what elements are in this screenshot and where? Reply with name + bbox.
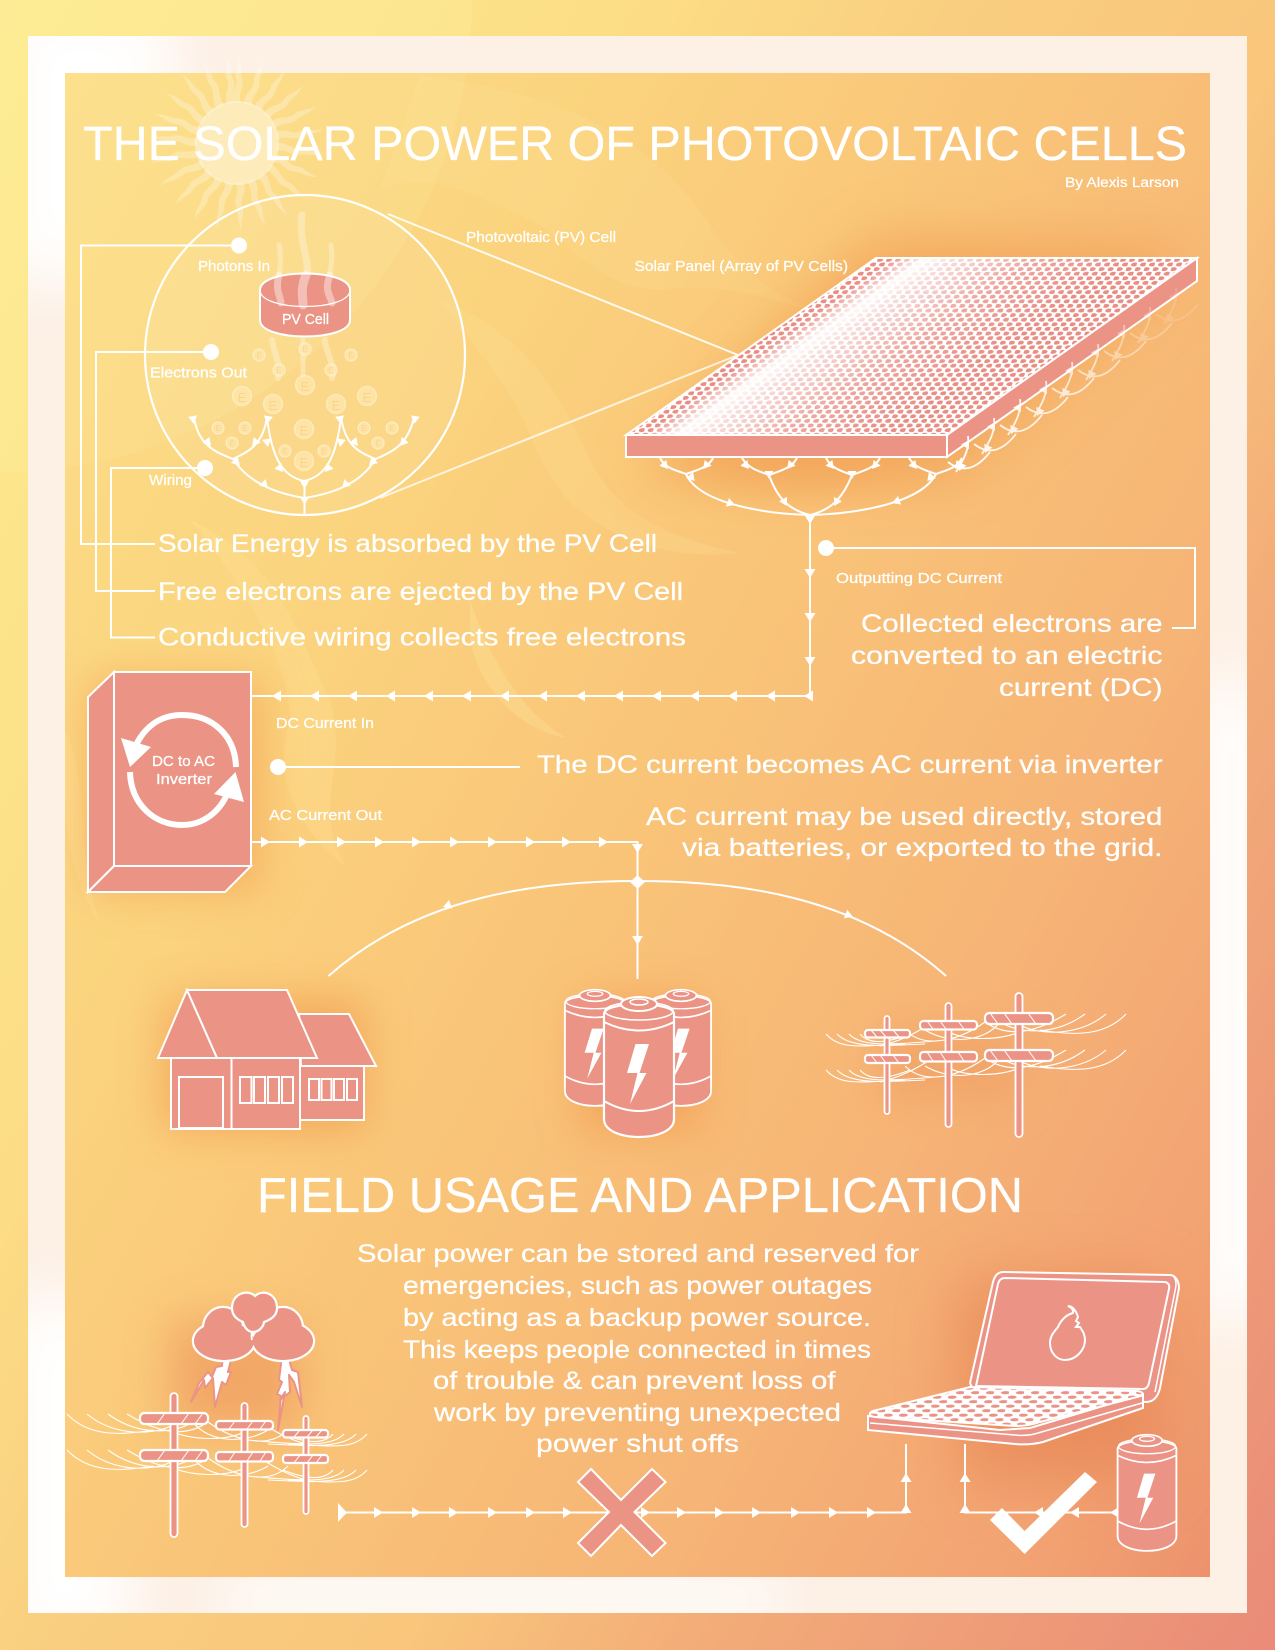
text: AC current uses: via batteries, or exported to the grid. (682, 834, 1162, 862)
icon: pear logo (1050, 1306, 1085, 1360)
text: AC current uses: AC current may be used directly, stored (646, 803, 1162, 831)
panel: photovoltaic cell magnified circle: E (242, 424, 248, 433)
text: collected electrons: Collected electrons are (861, 610, 1162, 638)
panel: photovoltaic cell magnified circle: E (361, 424, 367, 433)
inverter: DC to AC (152, 754, 215, 770)
panel: photovoltaic cell magnified circle: E (375, 439, 381, 448)
panel: photovoltaic cell magnified circle: E (321, 447, 327, 456)
icon: batteries (565, 990, 711, 1137)
text: field usage paragraph: power shut offs (536, 1430, 739, 1458)
solar panel (626, 258, 1197, 457)
byline: By Alexis Larson (1065, 175, 1179, 190)
flow line from X up to laptop (634, 1444, 912, 1518)
AC output line and distribution arc (251, 836, 946, 979)
heading: field usage: FIELD USAGE AND APPLICATION (257, 1169, 1023, 1223)
text: field usage paragraph: work by preventing unexpected (433, 1399, 841, 1427)
panel: photovoltaic cell magnified circle: E (300, 455, 309, 470)
label: solar panel: Solar Panel (Array of PV Cells) (634, 259, 848, 275)
text: collected electrons (851, 610, 1162, 702)
panel: photovoltaic cell magnified circle: E (282, 447, 288, 456)
callout: electrons out: Electrons Out (150, 366, 247, 382)
callout: photons in (81, 238, 270, 544)
callout: wiring (111, 460, 213, 638)
icon: sun (149, 55, 325, 231)
icon: PV cell cylinder: PV Cell (282, 312, 329, 328)
panel: photovoltaic cell magnified circle: E (229, 439, 235, 448)
icon: storm cloud and lightning (191, 1293, 314, 1430)
callout: wiring: Wiring (149, 473, 192, 489)
text: free electrons ejected: Free electrons are ejected by the PV Cell (158, 578, 683, 606)
wiring tree under panel and DC current line (251, 458, 964, 702)
icon: laptop (868, 1272, 1179, 1444)
label: AC current out: AC Current Out (269, 808, 382, 824)
callout: photons in: Photons In (198, 259, 270, 275)
callout: DC becomes AC: The DC current becomes AC current via inverter (537, 751, 1162, 779)
inverter (88, 672, 251, 892)
icon: X mark (578, 1469, 666, 1556)
text: field usage paragraph: This keeps people connected in times (403, 1336, 871, 1364)
wiring tree in circle (188, 415, 420, 514)
icon: house (158, 990, 376, 1129)
text: field usage paragraph (357, 1240, 919, 1458)
icon: conversion arrows (121, 715, 244, 825)
icon: power lines (826, 993, 1126, 1137)
label: DC current in: DC Current In (276, 716, 374, 732)
label: photovoltaic cell: Photovoltaic (PV) Cell (466, 230, 616, 246)
icon: storm damaged power lines (67, 1393, 367, 1537)
panel: photovoltaic cell magnified circle: E (363, 390, 372, 405)
electrons (212, 343, 398, 470)
callout: DC becomes AC (270, 751, 1162, 779)
icon: check mark (990, 1472, 1097, 1554)
text: field usage paragraph: of trouble & can prevent loss of (433, 1367, 836, 1395)
icon: PV cell cylinder (260, 274, 350, 336)
text: collected electrons: converted to an electric (851, 642, 1162, 670)
text: field usage paragraph: emergencies, such as power outages (403, 1272, 872, 1300)
panel: photovoltaic cell magnified circle: E (215, 424, 221, 433)
callout: outputting DC current: Outputting DC Current (836, 571, 1002, 587)
panel: photovoltaic cell magnified circle: E (256, 351, 262, 360)
flow line from battery up to laptop (960, 1444, 1119, 1518)
icon: photon waves (272, 215, 333, 378)
icon: backup battery (1118, 1435, 1176, 1551)
panel: photovoltaic cell magnified circle: E (302, 345, 308, 354)
text: collected electrons: current (DC) (999, 674, 1162, 702)
panel: photovoltaic cell magnified circle: E (269, 398, 278, 413)
panel: photovoltaic cell magnified circle (145, 195, 465, 515)
text: wiring collects: Conductive wiring collects free electrons (158, 624, 686, 652)
text: solar energy absorbed: Solar Energy is absorbed by the PV Cell (158, 530, 657, 558)
panel: photovoltaic cell magnified circle: E (348, 351, 354, 360)
text: field usage paragraph: by acting as a backup power source. (403, 1304, 871, 1332)
panel: photovoltaic cell magnified circle: E (328, 366, 334, 375)
panel: photovoltaic cell magnified circle: E (238, 390, 247, 405)
zoom lines from PV cell circle to panel (380, 214, 738, 498)
panel: photovoltaic cell magnified circle: E (332, 398, 341, 413)
panel: photovoltaic cell magnified circle: E (300, 423, 309, 438)
title: THE SOLAR POWER OF PHOTOVOLTAIC CELLS (83, 118, 1187, 171)
callout: electrons out (96, 344, 247, 591)
panel: photovoltaic cell magnified circle: E (276, 366, 282, 375)
panel: photovoltaic cell magnified circle: E (301, 379, 310, 394)
text: AC current uses (646, 803, 1162, 862)
callout: outputting DC current (818, 540, 1195, 628)
wiring under panel side (948, 288, 1198, 473)
panel: photovoltaic cell magnified circle: E (389, 424, 395, 433)
flow line to failed X (338, 1503, 610, 1522)
text: field usage paragraph: Solar power can be stored and reserved for (357, 1240, 919, 1268)
inverter: Inverter (156, 772, 212, 788)
